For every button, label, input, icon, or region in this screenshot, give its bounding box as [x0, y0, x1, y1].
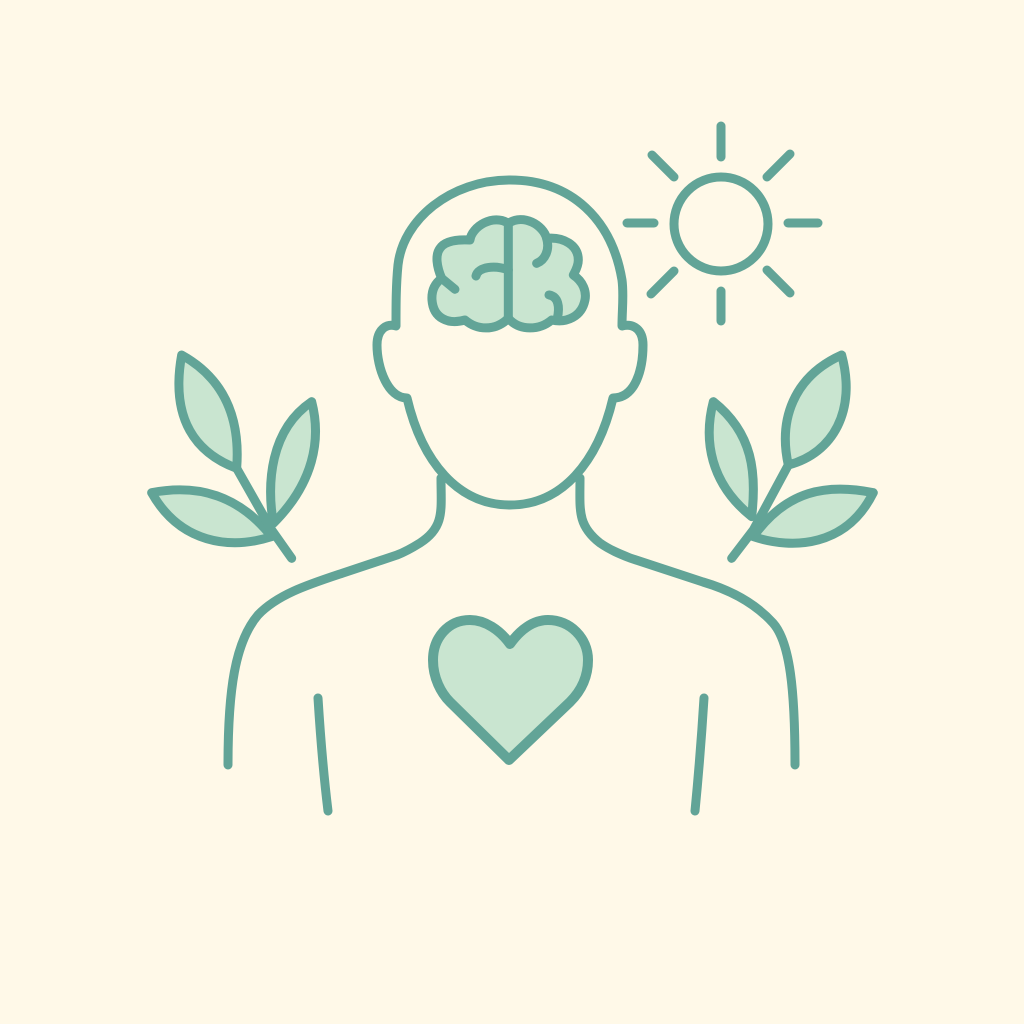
icon: left leaves — [152, 355, 316, 558]
icon: sun — [627, 126, 818, 321]
icon: right leaves — [709, 355, 873, 558]
body outline — [228, 478, 795, 811]
icon: heart — [433, 620, 588, 760]
icon: brain — [432, 220, 585, 328]
head outline — [377, 180, 643, 505]
